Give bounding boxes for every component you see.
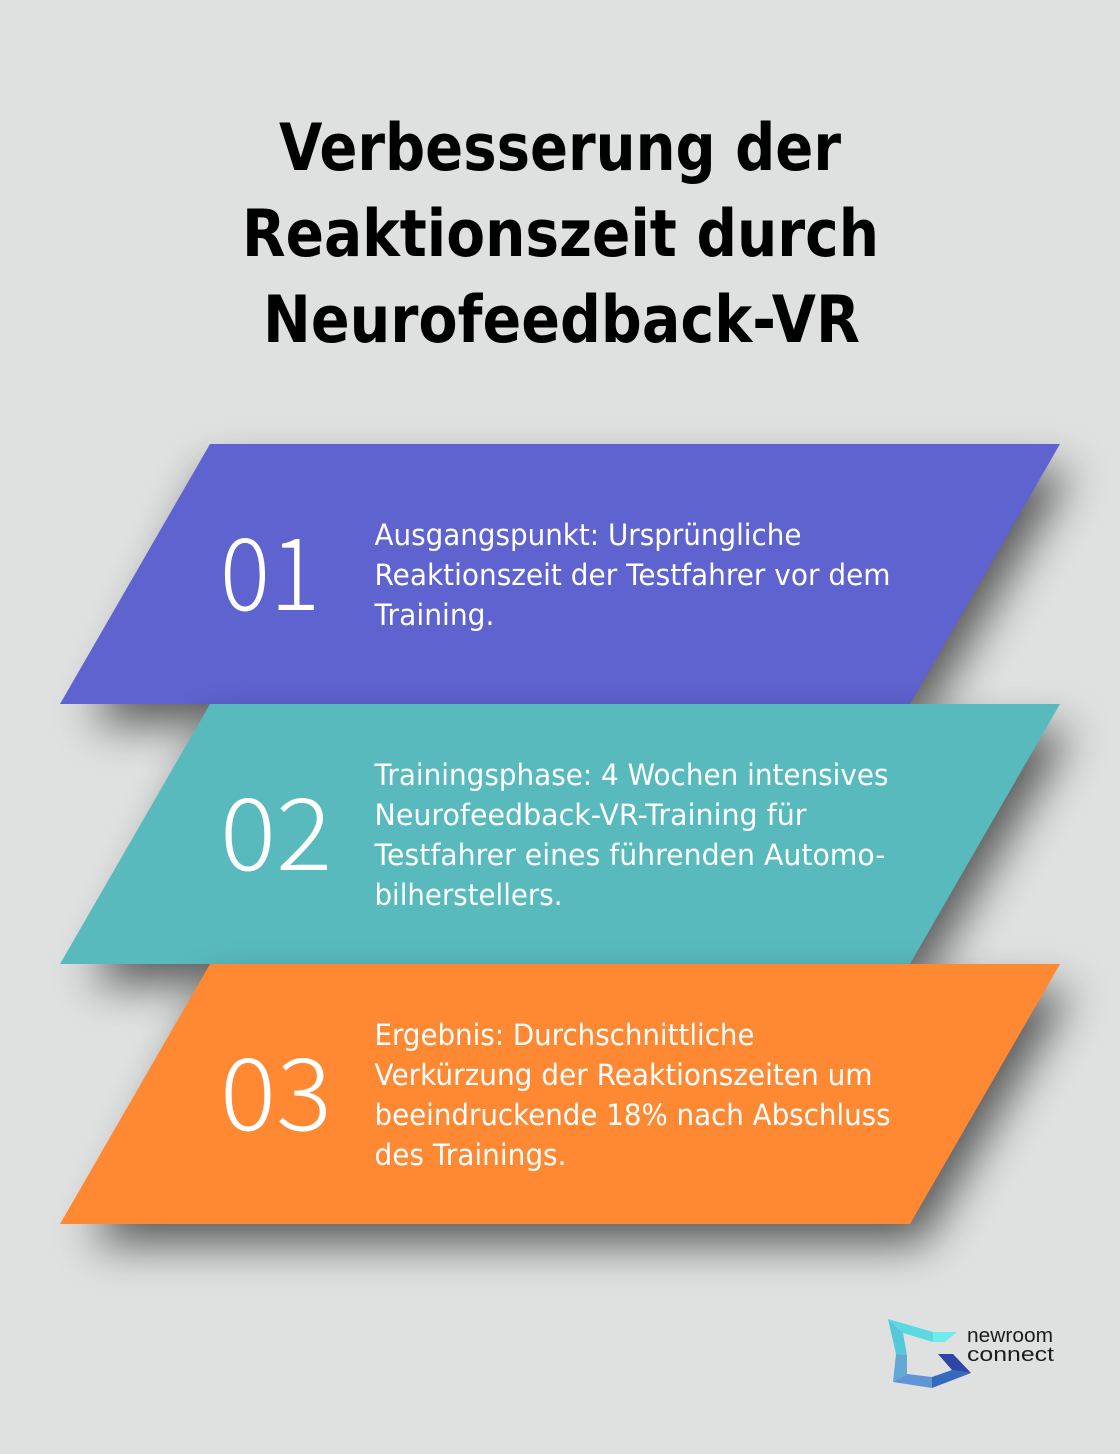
text: step 01: Training. bbox=[374, 598, 494, 632]
text: step 03: Ergebnis: Durchschnittliche bbox=[374, 1018, 754, 1052]
shadow: step 01 bbox=[92, 470, 1072, 724]
text: step 03: beeindruckende 18% nach Abschluss bbox=[374, 1098, 890, 1132]
text: step 01: Reaktionszeit der Testfahrer vor dem bbox=[374, 558, 890, 592]
parallelogram: step 02 bbox=[60, 704, 1060, 964]
title bbox=[242, 111, 879, 358]
parallelogram: step 03 bbox=[60, 964, 1060, 1224]
text: step 02: Trainingsphase: 4 Wochen intensives bbox=[374, 758, 888, 792]
text: step 02: Neurofeedback-VR-Training für bbox=[374, 798, 807, 832]
text: step 02 bbox=[374, 758, 888, 912]
text: logo wordmark: newroom bbox=[967, 1325, 1053, 1347]
text: step 02: Testfahrer eines führenden Automo- bbox=[374, 838, 886, 872]
panel: step 03 bbox=[60, 964, 1072, 1244]
icon: logo mark bbox=[888, 1319, 971, 1388]
shadow: step 02 bbox=[92, 730, 1072, 984]
panel: step 01 bbox=[60, 444, 1072, 724]
title: Neurofeedback-VR bbox=[263, 283, 860, 358]
panel: step 02 bbox=[60, 704, 1072, 984]
number: 02: 02 bbox=[220, 754, 332, 899]
text: step 01 bbox=[374, 518, 891, 632]
logo: newroom connect bbox=[888, 1319, 1055, 1388]
text: step 02: bilherstellers. bbox=[374, 878, 562, 912]
text: logo wordmark bbox=[967, 1325, 1055, 1366]
text: step 01: Ausgangspunkt: Ursprüngliche bbox=[374, 518, 802, 552]
shadow: step 03 bbox=[92, 990, 1072, 1244]
text: step 03: Verkürzung der Reaktionszeiten um bbox=[374, 1058, 872, 1092]
title: Reaktionszeit durch bbox=[242, 197, 879, 272]
number: 03: 03 bbox=[220, 1014, 332, 1159]
number: 01: 01 bbox=[220, 494, 320, 639]
title: Verbesserung der bbox=[279, 111, 841, 186]
text: step 03 bbox=[374, 1018, 890, 1172]
text: step 03: des Trainings. bbox=[374, 1138, 566, 1172]
parallelogram: step 01 bbox=[60, 444, 1060, 704]
text: logo wordmark: connect bbox=[967, 1344, 1055, 1366]
